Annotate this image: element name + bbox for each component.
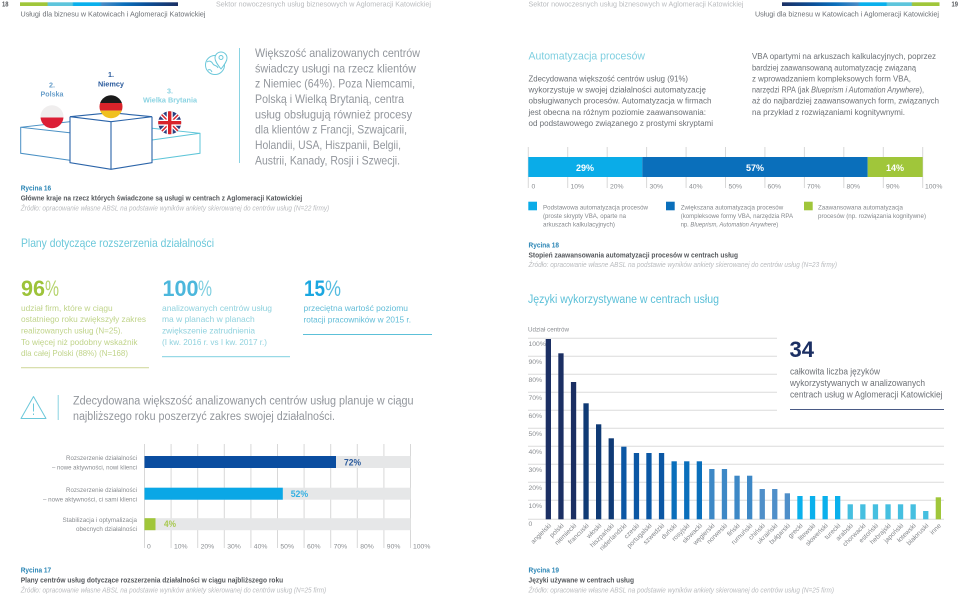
stat: 96%: % [45,276,59,301]
stat: 100%: zwiększenie zatrudnienia [162,326,255,336]
segment: increased 57%: 57% [746,163,764,173]
x axis language labels: japoński [882,522,905,545]
segment: advanced 14% [868,157,923,177]
axis labels: 20% [610,184,624,190]
stat: 96%: 96 [21,276,45,301]
stat: 100%: analizowanych centrów usług [162,304,272,313]
podium box: Polska [21,122,70,160]
caption: Rycina 17: Źródło: opracowanie własne ABSL na podstawie wyników ankiety skierowanej do centrów usług (N=25 firm) [20,585,326,594]
text block: automation left column: jest obecna na różnym poziomie zaawansowania: [527,108,706,117]
stat: 15%: % [325,276,341,301]
bar chart: languages [528,338,944,552]
caption: Rycina 19 [528,568,834,594]
x axis language labels: czeski [623,522,641,540]
podium chart: countries [21,70,200,169]
legend item: increased: np. Blueprism, Automation Anywhere) [681,222,778,228]
x axis language labels: niderlandzki [599,522,629,552]
text block: client countries: świadczy usługi na rzecz klientów [255,62,416,76]
x axis language labels: francuski [567,522,591,546]
y axis labels: 100% [528,341,546,348]
axis labels: 50% [728,184,742,190]
x axis language labels: ukraiński [756,522,780,546]
legend item: basic: Podstawowa automatyzacja procesów [543,204,648,212]
segment: advanced 14%: 14% [886,163,904,173]
axis title: Udział centrów [528,326,569,334]
bar: new activities, new clients: – nowe aktywności, nowi klienci [52,464,137,472]
podium box: Niemcy [70,113,152,169]
caption: Rycina 19: Źródło: opracowanie własne ABSL na podstawie wyników ankiety skierowanej do centrów usług (N=25 firm) [528,585,834,594]
stat: 96%: To więcej niż podobny wskaźnik [21,338,138,347]
x axis language labels: portugalski [626,522,654,550]
text block: automation right column: VBA opartymi na arkuszach kalkulacyjnych, poprzez [752,52,936,61]
x axis language labels: niemiecki [554,522,578,547]
text block: automation left column [527,75,713,128]
stat: 100% [162,276,290,357]
axis labels: 80% [846,184,860,190]
axis labels: 100% [413,544,430,550]
x axis language labels: hebrajski [869,522,893,546]
axis labels: 40% [254,544,267,550]
axis labels: 70% [334,544,347,550]
x axis language labels: łotewski [896,522,918,544]
text block: automation right column: aż do najbardziej zaawansowanych form, związanych [752,97,939,106]
y axis labels: 80% [528,377,542,384]
caption: Rycina 17 [20,568,326,594]
y axis labels: 70% [528,395,542,402]
x axis language labels: arabski [835,522,855,542]
axis labels: 60% [307,544,321,550]
x axis language labels: słowacki [681,522,704,545]
y axis labels: 0 [528,521,532,528]
callout: expansion conclusion [73,396,414,423]
segment: basic 29%: 29% [576,163,594,173]
x axis language labels: rumuński [730,522,755,546]
page header right [528,0,958,18]
x axis language labels: duński [660,522,679,541]
y axis labels: 10% [528,503,542,510]
axis labels: 40% [689,184,703,190]
stat: 34 languages: centrach usług w Aglomeracji Katowickiej [790,390,942,400]
bar: new activities, new clients: Rozszerzenie działalności [66,455,137,462]
text block: automation right column: bardziej zaawansowaną automatyzację związaną [752,63,917,72]
label: Niemcy: 1. [108,70,114,79]
stat: 96%: dla całej Polski (88%) (N=168) [21,349,128,358]
x axis language labels: norweski [706,522,729,546]
text block: client countries: usług obsługują również procesy [255,108,412,122]
segment: increased 57% [642,157,868,177]
page header left: Usługi dla biznesu w Katowicach i Aglomeracji Katowickiej [20,10,206,18]
y axis labels: 90% [528,359,542,366]
y axis labels: 60% [528,413,542,420]
stat: 100%: % [198,276,212,301]
legend item: increased [666,202,793,228]
stat: 96%: realizowanych usług (N=25). [21,326,123,336]
stat: 96%: ostatniego roku zwiększyły zakres [21,315,146,324]
y axis labels: 40% [528,449,542,456]
caption: Rycina 17: Rycina 17 [21,568,51,574]
bar: new activities, same clients: 52% [291,489,308,499]
x axis language labels: estoński [858,522,880,545]
stat: 15%: 15 [304,276,325,301]
stat: 100%: (I kw. 2016 r. vs I kw. 2017 r.) [162,338,267,347]
podium chart: countries: Wielka Brytania [143,96,198,105]
text block: automation left column: Zdecydowana większość centrów usług (91%) [528,75,688,84]
axis labels: 10% [174,544,188,550]
page header right: Usługi dla biznesu w Katowicach i Aglomeracji Katowickiej [755,10,939,18]
axis labels: 90% [886,184,900,190]
x axis language labels: hiszpański [589,522,616,549]
text block: client countries: Większość analizowanych centrów [255,46,420,60]
heading: languages: Języki wykorzystywane w centrach usług [528,294,719,306]
heading: process automation: Automatyzacja procesów [528,50,645,62]
bar: stabilisation: obecnych działalności [76,526,137,533]
caption: Rycina 16: Źródło: opracowanie własne ABSL na podstawie wyników ankiety skierowanej do centrów usług (N=22 firmy) [20,204,329,212]
stat: 34 languages [789,337,944,410]
bar: new activities, new clients: 72% [344,458,361,468]
legend item: increased: (kompleksowe formy VBA, narzędzia RPA [681,213,793,220]
bars [546,339,941,519]
text block: client countries: dla klientów z Francji, Szwajcarii, [255,122,407,136]
flag: Germany [99,95,123,119]
text block: automation right column: na przykład z rozwiązaniami kognitywnymi. [752,108,905,117]
stat: 15% [303,276,432,335]
stat: 15%: rotacji pracowników w 2015 r. [304,316,411,324]
divider beside callout [58,395,59,420]
icon: globe with location pin [206,52,227,74]
bar: stabilisation [62,517,176,533]
axis labels: 20% [201,544,214,550]
caption: Rycina 18: Rycina 18 [528,242,559,250]
y axis labels [528,341,546,528]
x axis language labels: angielski [530,522,553,546]
x axis language labels: polski [549,522,566,539]
podium chart: countries: Polska [40,90,64,99]
legend item: advanced: Zaawansowana automatyzacja [818,204,903,212]
x axis language labels: białoruski [906,522,931,547]
bar: stabilisation: Stabilizacja i optymalizacja [62,517,137,524]
x axis language labels: słoweński [805,522,830,548]
stat: 100%: ma w planach w planach [162,315,255,324]
text block: automation right column [752,52,939,117]
stat: 34 languages: całkowita liczba języków [790,367,880,377]
heading: expansion plans: Plany dotyczące rozszerzenia działalności [21,236,214,250]
stacked bar chart: automation level [528,147,942,190]
text block: automation right column: narzędzi RPA (jak Blueprism i Automation Anywhere), [752,86,924,95]
legend item: basic: (proste skrypty VBA, oparte na [543,213,626,220]
x axis language labels: litewski [797,522,817,542]
axis labels: 70% [807,184,821,190]
page header left: 18 [2,2,9,8]
x axis language labels: szwedzki [642,522,666,546]
podium chart: countries: Niemcy [98,80,124,89]
axis labels: 10% [570,184,584,190]
callout: expansion conclusion: Zdecydowana większość analizowanych centrów usług planuje w ciągu [73,396,414,408]
text block: client countries: Polską i Wielką Brytanią, centra [255,92,404,106]
axis labels: 30% [227,544,241,550]
y axis labels: 30% [528,467,542,474]
caption: Rycina 18: Źródło: opracowanie własne ABSL na podstawie wyników ankiety skierowanej do centrów usług (N=23 firmy) [528,260,837,269]
axis labels: 90% [387,544,400,550]
bar: new activities, same clients [43,487,308,504]
flag: Poland [40,106,64,128]
divider beside intro text [239,48,240,163]
axis labels: 100% [925,184,942,190]
stat: 96% [21,276,149,368]
x axis language labels [530,522,943,552]
axis labels: 30% [650,184,663,190]
bar: new activities, new clients [52,455,361,472]
x axis language labels: rosyjski [671,522,692,543]
podium box: Wielka Brytania [152,128,200,160]
legend item: basic [528,202,648,228]
bar: new activities, same clients: Rozszerzenie działalności [66,487,137,494]
x axis language labels: węgierski [691,522,717,548]
label: Wielka Brytania: 3. [167,86,173,96]
y axis labels: 20% [528,485,542,492]
x axis language labels: chorwacki [842,522,868,548]
x axis language labels: inne [929,522,943,536]
page header right: 19 [952,2,958,8]
x axis language labels: włoski [585,522,604,541]
caption: Rycina 17: Plany centrów usług dotyczące rozszerzenia działalności w ciągu najbliższego roku [21,578,283,584]
label: Polska: 2. [49,80,55,90]
text block: automation left column: od podstawowego związanego z prostymi skryptami [528,119,713,128]
stat: 96%: udział firm, które w ciągu [21,304,113,313]
axis labels [147,544,430,550]
x axis language labels: turecki [824,522,843,541]
legend item: increased: Zwiększana automatyzacja procesów [681,204,783,212]
caption: Rycina 18 [528,242,837,269]
x axis language labels: bułgarski [768,522,792,546]
caption: Rycina 16 [20,186,329,212]
stat: 34 languages: 34 [790,337,815,362]
y axis labels: 50% [528,431,542,438]
stat: 15%: przeciętna wartość poziomu [304,304,408,313]
text block: automation left column: wykorzystuje w swojej działalności automatyzację [527,86,707,95]
bar: stabilisation: 4% [164,519,176,529]
axis labels: 0 [147,544,151,550]
caption: Rycina 19: Rycina 19 [528,568,559,574]
caption: Rycina 16: Główne kraje na rzecz których świadczone są usługi w centrach z Aglomeracji Katowickiej [21,196,302,202]
text block: automation left column: obsługiwanych procesów. Automatyzacja w firmach [528,97,712,106]
caption: Rycina 18: Stopień zaawansowania automatyzacji procesów w centrach usług [528,252,738,260]
text block: client countries [255,46,420,168]
page header left [2,0,431,18]
bar chart: expansion plans [43,444,430,550]
x axis language labels: chiński [748,522,767,542]
legend: automation level [528,202,926,228]
text block: automation right column: z wprowadzaniem kompleksowych form VBA, [752,74,911,83]
stat: 100%: 100 [162,276,198,301]
caption: Rycina 16: Rycina 16 [21,186,51,192]
bar: new activities, same clients: – nowe aktywności, ci sami klienci [43,496,137,504]
legend item: advanced: procesów (np. rozwiązania kognitywne) [818,213,926,220]
axis labels: 60% [768,184,781,190]
text block: client countries: Holandii, USA, Hiszpanii, Belgii, [255,138,401,152]
axis labels [532,184,942,190]
text block: client countries: Austrii, Kanady, Rosji i Szwecji. [255,154,400,168]
icon: warning triangle [21,396,46,418]
axis labels: 50% [280,544,294,550]
text block: client countries: z Niemiec (64%). Poza Niemcami, [255,76,415,90]
legend item: basic: arkuszach kalkulacyjnych) [543,222,615,228]
segment: basic 29% [528,157,642,177]
legend item: advanced [804,202,926,220]
callout: expansion conclusion: najbliższego roku poszerzyć zakres swojej działalności. [73,411,335,423]
x axis language labels: grecki [787,522,805,540]
axis labels: 0 [532,184,536,190]
stat: 34 languages: wykorzystywanych w analizowanych [789,378,925,388]
flag: United Kingdom [158,111,182,135]
axis labels: 80% [360,544,374,550]
x axis language labels: fiński [726,522,742,538]
caption: Rycina 19: Języki używane w centrach usług [528,578,634,584]
